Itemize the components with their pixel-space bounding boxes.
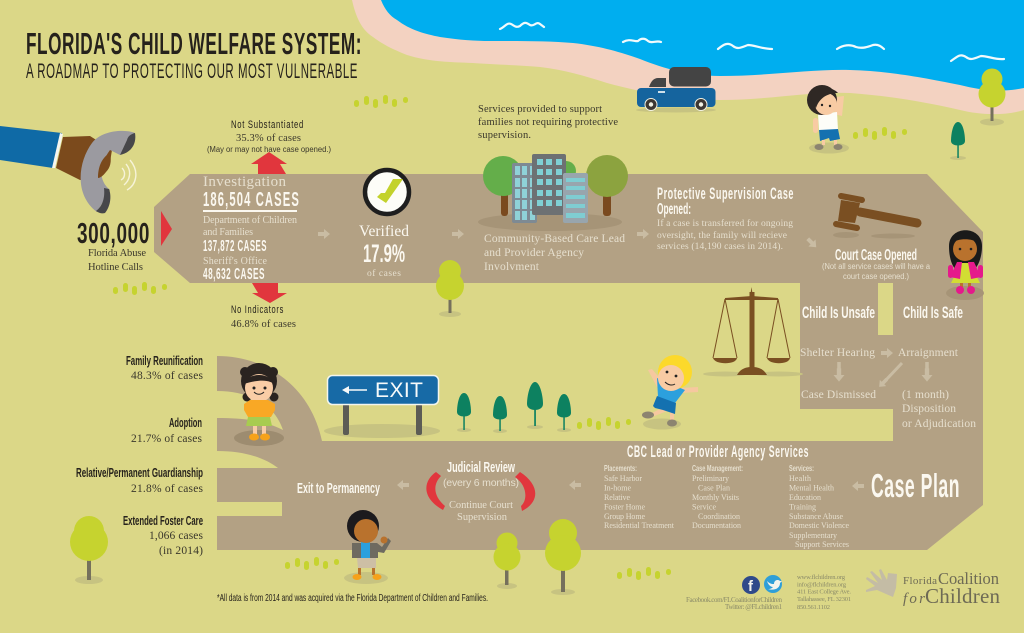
beach bbox=[352, 0, 1024, 114]
lime trees bbox=[70, 68, 1006, 595]
list: case management: Case Plan bbox=[698, 484, 730, 492]
text: community-based care bbox=[484, 233, 625, 273]
heading: exit to permanency: Exit to Permanency bbox=[297, 480, 380, 497]
stat: hotline calls: Hotline Calls bbox=[88, 262, 143, 273]
list: services: Services: bbox=[789, 463, 814, 473]
contact info bbox=[797, 574, 851, 611]
list: placements: Relative bbox=[604, 493, 630, 502]
red triangle marker bbox=[161, 211, 172, 246]
logo: florida coalition for children: Children bbox=[925, 584, 1000, 608]
text: protective supervision: Opened: bbox=[657, 201, 691, 218]
arrow: no indicators bbox=[252, 283, 287, 303]
list: case management: Monthly Visits bbox=[692, 493, 739, 502]
arrows: court flow bbox=[834, 348, 932, 390]
water bbox=[381, 0, 1024, 91]
list: case management: Service bbox=[692, 502, 716, 512]
character: boy waving bbox=[807, 85, 849, 154]
investigation block bbox=[203, 174, 300, 283]
exit sign bbox=[324, 376, 440, 438]
social links: Facebook.com/FLCoalitionforChildren bbox=[686, 596, 782, 604]
judicial review cycle: Judicial Review bbox=[447, 459, 515, 476]
heading: child is unsafe: Child Is Unsafe bbox=[802, 304, 875, 322]
text: family reunification: 48.3% of cases bbox=[131, 370, 204, 382]
list: placements: Safe Harbor bbox=[604, 474, 642, 483]
text: services: supervision. bbox=[478, 130, 531, 141]
investigation block: and Families bbox=[203, 227, 253, 238]
arrow bbox=[804, 235, 820, 251]
text: court case opened bbox=[822, 247, 931, 281]
dark green tree top right bbox=[950, 122, 966, 160]
social links bbox=[686, 596, 782, 611]
list: placements: In-home bbox=[604, 484, 631, 492]
stat: hotline calls: Florida Abuse bbox=[88, 248, 146, 259]
decorative grass tufts bbox=[113, 95, 907, 580]
stat: verified: Verified bbox=[359, 223, 409, 240]
icon: hand holding phone bbox=[0, 126, 136, 213]
text: extended foster care: Extended Foster Care bbox=[123, 513, 203, 528]
list: services: Domestic Violence bbox=[789, 521, 849, 530]
contact info: Tallahassee, FL 32301 bbox=[797, 596, 851, 603]
arrow: not substantiated bbox=[251, 152, 287, 174]
investigation block: Investigation bbox=[203, 174, 286, 190]
text: court case opened: court case opened.) bbox=[843, 272, 909, 281]
investigation block: 186,504 CASES bbox=[203, 189, 300, 211]
judicial review cycle: Continue Court bbox=[449, 500, 513, 511]
arrow bbox=[452, 229, 464, 239]
text: court steps: Arraignment bbox=[898, 347, 959, 359]
list: placements: Residential Treatment bbox=[604, 521, 675, 530]
text: extended foster care bbox=[123, 513, 204, 557]
text: not substantiated bbox=[207, 119, 331, 154]
list: services: Supplementary bbox=[789, 531, 837, 540]
stat: hotline calls bbox=[77, 218, 150, 273]
text: court case opened: (Not all service cases will have a bbox=[822, 262, 931, 271]
text: protective supervision: If a case is transferred for ongoing bbox=[657, 218, 793, 229]
text: community-based care: Involvment bbox=[484, 261, 540, 273]
exit sign: EXIT bbox=[375, 379, 423, 402]
list: case management: Documentation bbox=[692, 521, 741, 530]
text: guardianship: Relative/Permanent Guardianship bbox=[76, 465, 203, 480]
list: case management: Preliminary bbox=[692, 474, 729, 483]
contact info: 411 East College Ave. bbox=[797, 588, 851, 596]
icon: check badge bbox=[365, 170, 409, 214]
investigation block: 48,632 CASES bbox=[203, 266, 265, 283]
icon: scales of justice bbox=[703, 287, 803, 376]
road bbox=[154, 174, 983, 550]
text: court steps: Case Dismissed bbox=[801, 389, 876, 401]
list: placements bbox=[604, 463, 675, 530]
character: boy in grey jacket bbox=[344, 510, 391, 584]
arrow bbox=[569, 480, 581, 490]
text: no indicators: No Indicators bbox=[231, 304, 284, 316]
list: services: Support Services bbox=[795, 540, 849, 549]
text: court steps: Disposition bbox=[902, 403, 956, 415]
text: court steps: (1 month) bbox=[902, 389, 949, 401]
arrow bbox=[397, 480, 409, 490]
slit between child safe and unsafe bbox=[878, 283, 893, 335]
text: guardianship bbox=[76, 465, 204, 495]
logo: florida coalition for children bbox=[903, 569, 1000, 608]
text: no indicators bbox=[231, 304, 296, 330]
text: protective supervision: Protective Supervision Case bbox=[657, 185, 794, 203]
title: FLORIDA'S CHILD WELFARE SYSTEM: bbox=[26, 26, 362, 61]
investigation block: 137,872 CASES bbox=[203, 238, 267, 255]
text: adoption bbox=[131, 415, 203, 445]
text: court case opened: Court Case Opened bbox=[835, 247, 917, 264]
character: blond boy bbox=[642, 355, 698, 430]
investigation block: Department of Children bbox=[203, 215, 297, 226]
text: protective supervision: services (14,190 cases in 2014). bbox=[657, 241, 783, 252]
heading: cbc services: CBC Lead or Provider Agency Services bbox=[627, 443, 809, 461]
text: adoption: Adoption bbox=[169, 415, 202, 430]
stat: verified bbox=[359, 223, 409, 279]
logo: hand bbox=[866, 569, 897, 597]
contact info: 850.561.1102 bbox=[797, 604, 830, 611]
character: girl with buns bbox=[234, 363, 284, 446]
icon: facebook: f bbox=[748, 578, 754, 595]
icon: facebook bbox=[742, 576, 760, 595]
list: placements: Foster Home bbox=[604, 502, 645, 512]
contact info: info@flchildren.org bbox=[797, 582, 847, 588]
icon: gavel bbox=[833, 196, 917, 238]
arrow bbox=[637, 229, 649, 239]
text: protective supervision bbox=[657, 185, 794, 252]
text: family reunification: Family Reunification bbox=[126, 353, 203, 368]
text: not substantiated: 35.3% of cases bbox=[236, 133, 301, 144]
list: services: Education bbox=[789, 493, 821, 502]
text: not substantiated: Not Substantiated bbox=[231, 119, 304, 131]
text: protective supervision: oversight, the family will recieve bbox=[657, 230, 787, 241]
list: services: Training bbox=[789, 502, 816, 512]
dark green trees bbox=[457, 382, 571, 433]
text: court steps: or Adjudication bbox=[902, 418, 976, 430]
list: services: Health bbox=[789, 474, 811, 483]
car bbox=[636, 67, 716, 112]
judicial review cycle: (every 6 months) bbox=[443, 477, 519, 489]
text: services bbox=[478, 104, 618, 141]
logo: florida coalition for children: for bbox=[903, 591, 925, 607]
icon: twitter bbox=[764, 575, 782, 593]
icon: buildings and trees bbox=[478, 154, 628, 231]
text: community-based care: and Provider Agency bbox=[484, 247, 584, 259]
waves bbox=[500, 23, 1004, 61]
investigation block: Sheriff's Office bbox=[203, 256, 268, 267]
stat: verified: 17.9% bbox=[363, 240, 405, 268]
logo: florida coalition for children: Florida bbox=[903, 575, 937, 587]
character: girl with pink jacket bbox=[946, 230, 984, 300]
arrow bbox=[318, 229, 330, 239]
footnote: *All data is from 2014 and was acquired via the Florida Department of Children and Families. bbox=[217, 593, 488, 604]
text: family reunification bbox=[126, 353, 204, 382]
text: court steps: Shelter Hearing bbox=[800, 347, 875, 359]
text: services: Services provided to support bbox=[478, 104, 602, 115]
title: A ROADMAP TO PROTECTING OUR MOST VULNERABLE bbox=[26, 60, 358, 83]
list: services: Substance Abuse bbox=[789, 512, 843, 521]
text: court steps bbox=[800, 347, 976, 430]
text: extended foster care: (in 2014) bbox=[159, 545, 203, 557]
stat: verified: of cases bbox=[367, 268, 401, 279]
judicial review cycle bbox=[426, 459, 535, 523]
list: placements: Group Home bbox=[604, 512, 645, 521]
social links: Twitter: @FLchildren1 bbox=[725, 603, 782, 611]
list: services bbox=[789, 463, 849, 549]
text: not substantiated: (May or may not have case opened.) bbox=[207, 145, 331, 154]
arrow bbox=[852, 481, 864, 491]
list: case management: Coordination bbox=[698, 512, 740, 521]
text: services: families not requiring protective bbox=[478, 117, 618, 128]
text: community-based care: Community-Based Care Lead bbox=[484, 233, 625, 245]
text: guardianship: 21.8% of cases bbox=[131, 483, 204, 495]
stat: hotline calls: 300,000 bbox=[77, 218, 150, 250]
text: no indicators: 46.8% of cases bbox=[231, 319, 296, 330]
title bbox=[26, 26, 362, 83]
logo: florida coalition for children: Coalition bbox=[938, 569, 999, 588]
contact info: www.flchildren.org bbox=[797, 574, 846, 581]
list: case management: Case Management: bbox=[692, 463, 743, 473]
judicial review cycle: Supervision bbox=[457, 512, 508, 523]
text: extended foster care: 1,066 cases bbox=[149, 530, 204, 542]
text: adoption: 21.7% of cases bbox=[131, 433, 203, 445]
heading: child is safe: Child Is Safe bbox=[903, 304, 963, 322]
list: placements: Placements: bbox=[604, 463, 637, 473]
list: case management bbox=[692, 463, 743, 530]
list: services: Mental Health bbox=[789, 484, 834, 492]
